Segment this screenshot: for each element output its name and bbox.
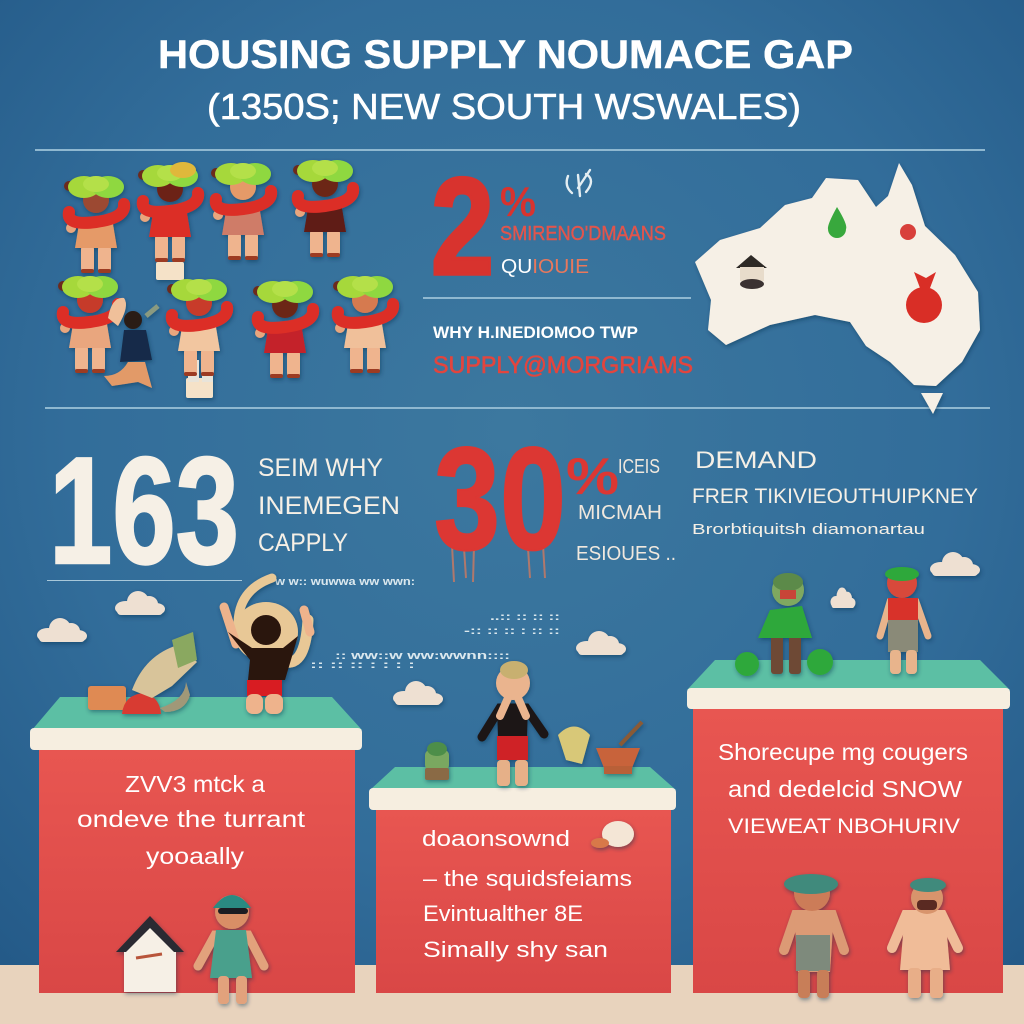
right block text: and dedelcid SNOW [728, 776, 962, 802]
small noisy text lines: :: :: :: : : : : [310, 659, 415, 671]
figures group: top left [58, 160, 393, 398]
small noisy text lines: w w:: wuwwa ww wwn: [274, 576, 415, 588]
stat: 30% [434, 417, 676, 582]
middle block text [422, 826, 632, 962]
middle block text: Simally shy san [423, 937, 608, 962]
caption 30%: ICEIS [618, 456, 660, 478]
left block text: ondeve the turrant [77, 806, 306, 832]
figure 1 [64, 176, 124, 273]
figure 4 [293, 160, 353, 257]
figure: bottom right on right block [892, 878, 958, 998]
big number 30: 30 [434, 417, 566, 580]
figure 8 [333, 276, 393, 373]
supply caption [433, 323, 693, 379]
middle block text: doaonsownd [422, 826, 570, 851]
left block text [77, 771, 306, 869]
figure 6 [167, 279, 227, 398]
demand text [692, 447, 978, 538]
floor [0, 965, 1024, 1024]
caption 163: SEIM WHY [258, 454, 383, 482]
right block text: Shorecupe mg cougers [718, 739, 968, 765]
right block text: VIEWEAT NBOHURIV [728, 815, 960, 838]
map pin: house [736, 255, 767, 289]
map of Australia [695, 163, 980, 414]
middle block text: Evintualther 8E [423, 901, 583, 926]
small noisy text lines: -:: :: :: : :: :: [464, 625, 560, 637]
figure: green scarf on right block [735, 573, 833, 676]
caption 30% [576, 456, 676, 565]
clouds [37, 552, 980, 705]
supply caption: SUPPLY@MORGRIAMS [433, 352, 693, 379]
clay pot [425, 742, 449, 780]
map pin: red pot [906, 272, 942, 323]
figure: red shirt on right block [880, 567, 928, 674]
left block text: ZVV3 mtck a [125, 771, 265, 797]
small clay bird [591, 821, 634, 848]
right block text [718, 739, 968, 838]
red caption: SMIRENO'DMAANS [500, 223, 666, 245]
title: (1350S; NEW SOUTH WSWALES) [207, 86, 801, 127]
demand text: Brorbtiquitsh diamonartau [692, 521, 925, 538]
map pin: small red [900, 224, 916, 240]
small noisy text lines: :: ww::w ww:wwnn:::: [335, 650, 510, 662]
map pin: green drop [828, 207, 846, 238]
percent sign: % [500, 178, 536, 225]
panel: left block [30, 578, 362, 1004]
demand text: FRER TIKIVIEOUTHUIPKNEY [692, 485, 978, 508]
figure 2 [138, 162, 198, 280]
figure: bottom left on right block [784, 874, 844, 998]
figure on middle block [482, 661, 544, 786]
stat: 2% [431, 150, 666, 304]
stat: 163: 163 [49, 426, 239, 596]
caption 30%: ESIOUES .. [576, 543, 676, 565]
figure 5 with kneeling companion [58, 276, 158, 388]
supply caption: WHY H.INEDIOMOO TWP [433, 323, 638, 342]
clay animal and bowl [558, 722, 642, 774]
title [158, 33, 853, 127]
caption 163 [258, 454, 400, 557]
caption 163: INEMEGEN [258, 492, 400, 520]
small doodle icon [567, 170, 591, 196]
caption 30%: MICMAH [578, 502, 662, 524]
figure 3 [211, 163, 271, 260]
drips [452, 545, 545, 582]
caption line two: QUIOUIE [501, 256, 589, 278]
figure: waving on left block [224, 578, 310, 714]
middle block text: – the squidsfeiams [423, 866, 632, 891]
small noisy text lines [47, 576, 560, 671]
panel: middle block [369, 661, 676, 993]
clay pile on left block [88, 632, 197, 714]
big number 2: 2 [431, 150, 494, 304]
small noisy text lines: ..:: :: :: :: [490, 611, 560, 623]
panel: right block [687, 567, 1010, 998]
figure 7 [253, 281, 313, 378]
title: HOUSING SUPPLY NOUMACE GAP [158, 33, 853, 77]
figure with house at bottom of left block [116, 895, 264, 1004]
left block text: yooaally [146, 843, 245, 869]
percent sign: % [566, 448, 619, 506]
demand text: DEMAND [695, 447, 817, 474]
caption 163: CAPPLY [258, 529, 348, 557]
